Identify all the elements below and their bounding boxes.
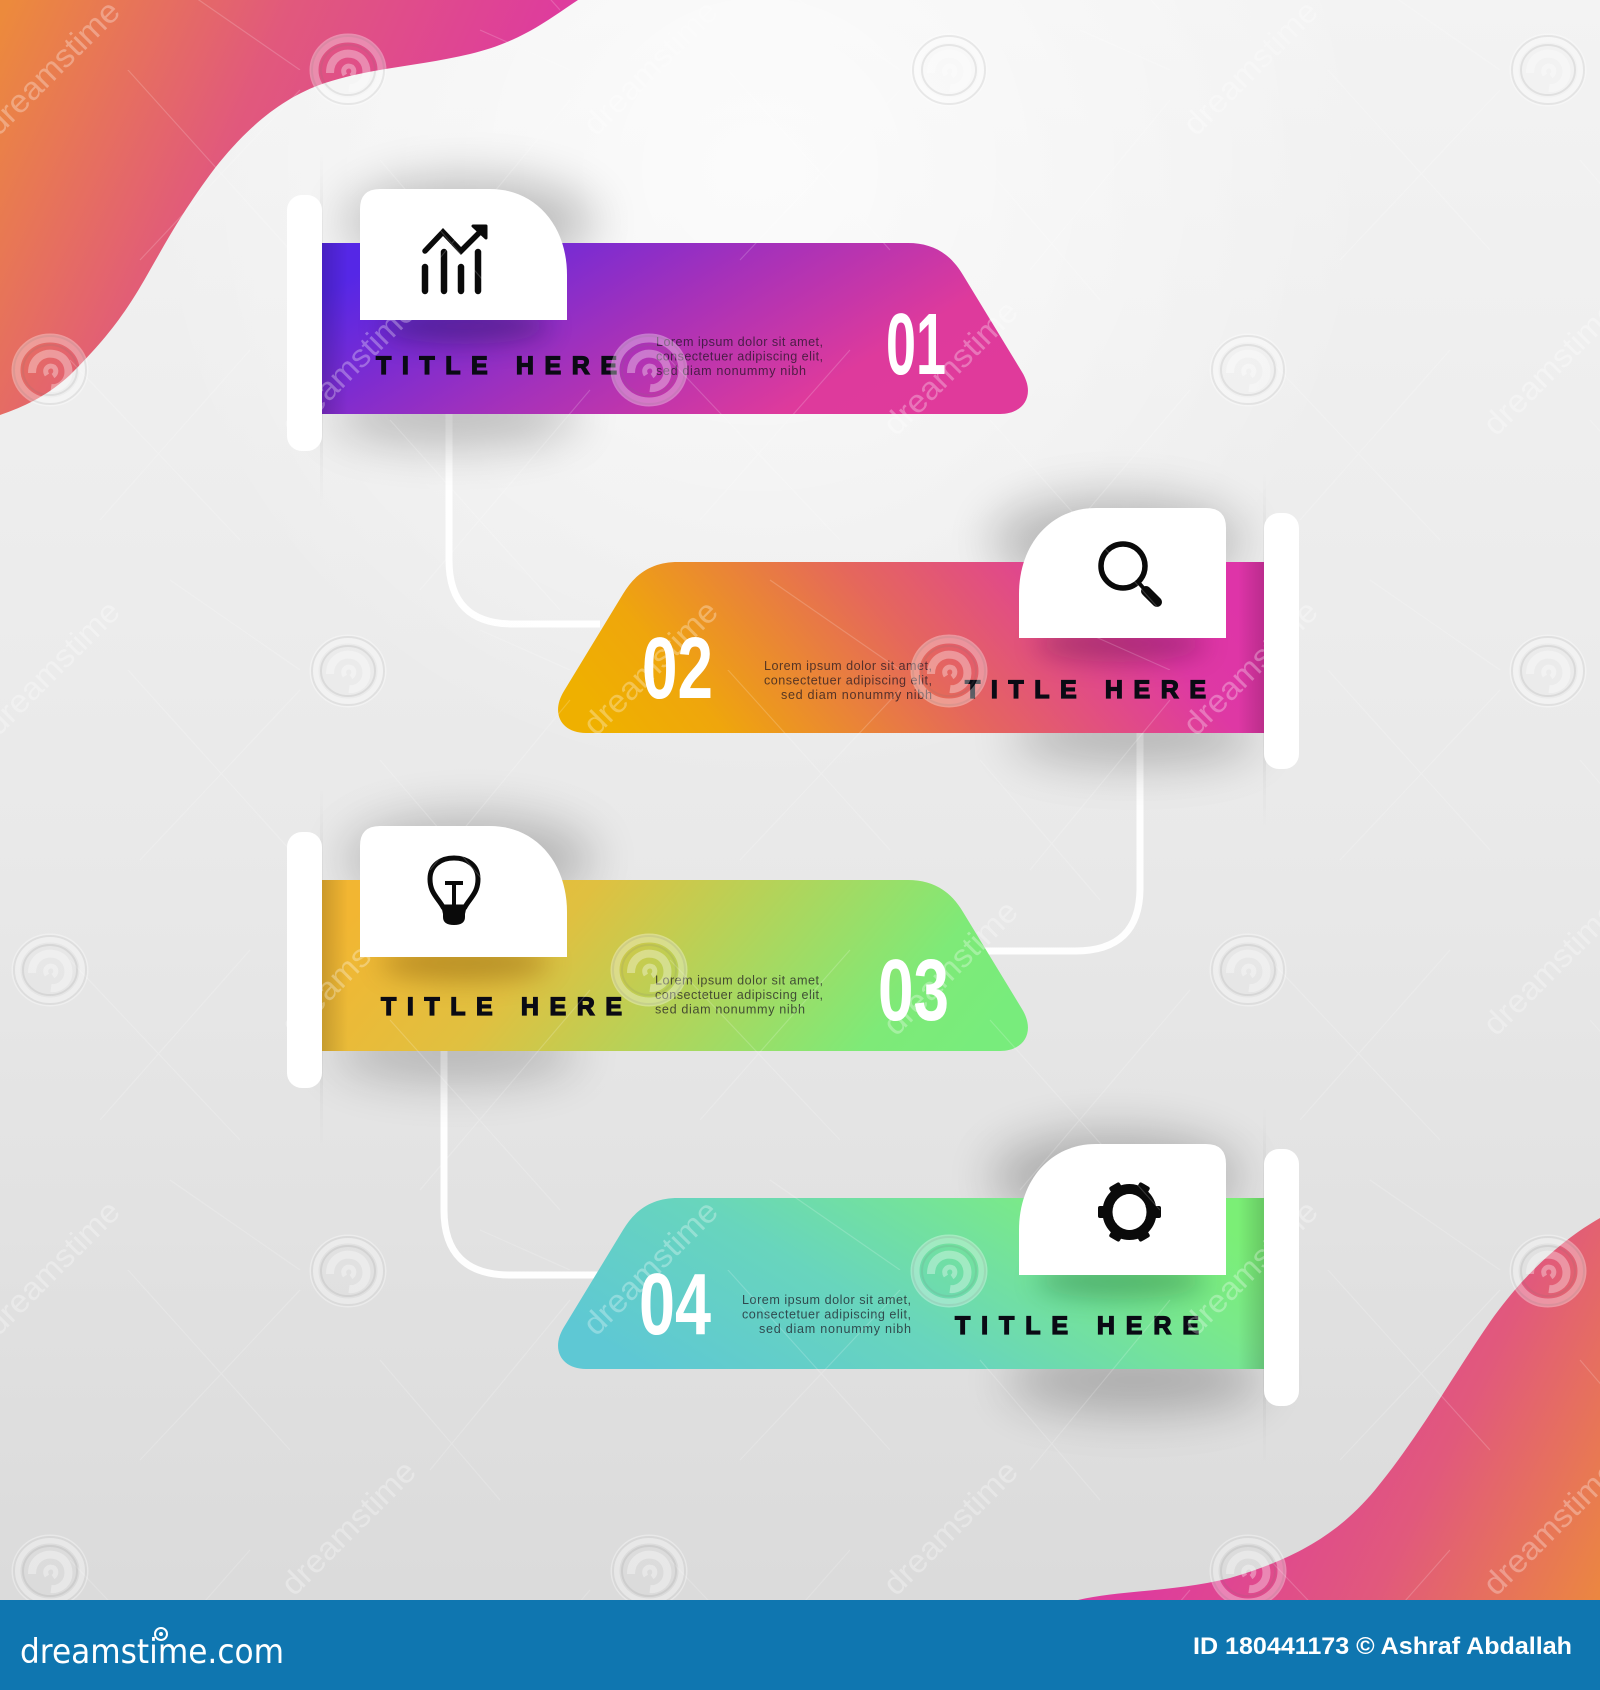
footer logo: dreamstime.com: [20, 1632, 284, 1672]
step 1 side rail: [287, 195, 322, 451]
step 1 panel: consectetuer adipiscing elit,: [656, 350, 823, 364]
step 2 number: 02: [642, 620, 713, 717]
step 3 number: 03: [878, 942, 949, 1039]
watermark overlay: dreamstime: [274, 293, 423, 442]
step 2 gradient bar: [558, 562, 1264, 733]
step 3 gradient bar: [322, 880, 1028, 1051]
step 1 title: TITLE HERE: [376, 352, 617, 380]
step 2 panel: consectetuer adipiscing elit,: [764, 674, 932, 688]
watermark overlay: dreamstime: [876, 1453, 1025, 1602]
step 4 icon card: [1019, 1144, 1226, 1275]
step 4 title: TITLE HERE: [955, 1312, 1199, 1340]
step 2 title: TITLE HERE: [965, 676, 1206, 704]
step 3 panel: sed diam nonummy nibh: [655, 1002, 805, 1016]
step 4 panel: sed diam nonummy nibh: [759, 1322, 911, 1336]
icon: magnifier: [1101, 544, 1157, 602]
watermark overlay: dreamstime: [1176, 0, 1325, 142]
watermark overlay: dreamstime: [876, 293, 1025, 442]
icon: gear: [1098, 1182, 1161, 1242]
step 4 side rail: [1264, 1149, 1299, 1406]
step 3 side rail: [287, 832, 322, 1088]
watermark overlay: dreamstime: [274, 1453, 423, 1602]
icon: growth chart: [425, 226, 486, 291]
step 4 panel: [558, 1105, 1299, 1465]
step 3 panel: consectetuer adipiscing elit,: [655, 988, 823, 1002]
step 1 panel: sed diam nonummy nibh: [656, 364, 806, 378]
connector lines between steps: [444, 414, 1140, 1275]
watermark overlay: dreamstime: [876, 893, 1025, 1042]
step 4 number: 04: [639, 1256, 711, 1353]
step 2 icon card: [1019, 508, 1226, 638]
footer image id and credit: ID 180441173 © Ashraf Abdallah: [1193, 1633, 1572, 1660]
footer bar: [0, 1600, 1600, 1690]
step 1 gradient bar: [322, 243, 1028, 414]
watermark overlay: dreamstime: [576, 593, 725, 742]
watermark overlay: dreamstime: [1176, 1193, 1325, 1342]
step 4 panel: consectetuer adipiscing elit,: [742, 1308, 911, 1322]
step 4 gradient bar: [558, 1198, 1264, 1369]
icon: light bulb: [430, 858, 478, 925]
step 1 number: 01: [886, 296, 946, 393]
watermark overlay: dreamstime: [1176, 593, 1325, 742]
step 2 panel: sed diam nonummy nibh: [781, 688, 932, 702]
step 1 icon card: [360, 189, 567, 320]
step 2 side rail: [1264, 513, 1299, 769]
step 2 body text: Lorem ipsum dolor sit amet,: [764, 659, 932, 673]
step 3 panel: [287, 787, 1028, 1147]
decorative wave: top left: [0, 0, 578, 415]
step 3 icon card: [360, 826, 567, 957]
decorative wave: bottom right: [1078, 1218, 1600, 1600]
step 4 body text: Lorem ipsum dolor sit amet,: [742, 1293, 911, 1307]
step 2 panel: [558, 470, 1299, 830]
step 3 title: TITLE HERE: [381, 993, 622, 1021]
watermark overlay: dreamstime: [576, 0, 725, 142]
watermark overlay: dreamstime: [576, 1193, 725, 1342]
step 3 body text: Lorem ipsum dolor sit amet,: [655, 974, 823, 988]
watermark overlay: dreamstime: [274, 893, 423, 1042]
step 1 panel: [287, 150, 1028, 510]
step 1 body text: Lorem ipsum dolor sit amet,: [656, 335, 823, 349]
